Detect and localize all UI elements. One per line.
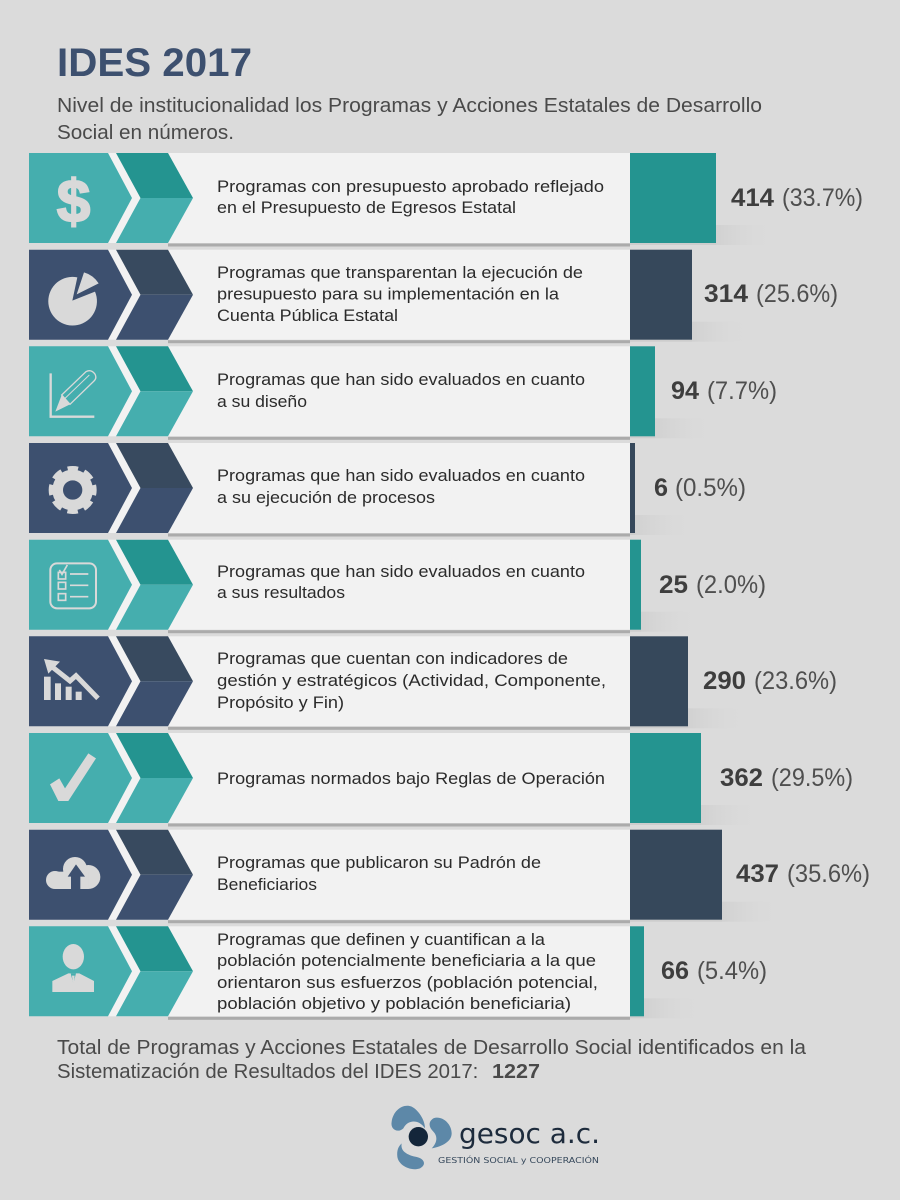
description 9: Programas que definen y cuantifican a la	[217, 930, 546, 949]
row 7: reglas de operación	[29, 733, 853, 826]
icon: dollar sign: $	[57, 168, 90, 235]
description 5: Programas que han sido evaluados en cuanto	[217, 562, 585, 581]
footer total note: Total de Programas y Acciones Estatales de Desarrollo Social identificados en la	[57, 1037, 807, 1059]
description 1: en el Presupuesto de Egresos Estatal	[217, 198, 516, 217]
logo: gesoc a.c.	[391, 1106, 600, 1169]
row 6: indicadores	[29, 636, 837, 730]
value 5: 25	[659, 571, 688, 599]
value 9: (5.4%)	[697, 957, 767, 985]
value 2: (25.6%)	[756, 280, 838, 308]
value 8: (35.6%)	[787, 860, 870, 888]
value 3: (7.7%)	[707, 377, 777, 405]
row 8: padrón de beneficiarios	[29, 830, 870, 923]
footer total note: Sistematización de Resultados del IDES 2017:	[57, 1061, 484, 1083]
value 4: 6	[654, 474, 668, 502]
row 4: evaluados en procesos	[29, 443, 746, 536]
value 1: 414	[731, 184, 774, 212]
value 4: (0.5%)	[675, 474, 746, 502]
icon: trend chart	[44, 659, 98, 700]
subtitle: Nivel de institucionalidad los Programas y Acciones Estatales de Desarrollo	[57, 95, 762, 117]
icon: pencil and axes	[51, 371, 96, 417]
description 3: a su diseño	[217, 392, 307, 411]
icon: person	[52, 944, 94, 992]
icon: checklist	[50, 563, 96, 608]
icon: gear	[52, 469, 93, 511]
value 3: 94	[671, 377, 699, 405]
footer total note: 1227	[492, 1061, 540, 1083]
value 6: 290	[703, 667, 746, 695]
row 2: cuenta pública	[29, 250, 838, 343]
description 2: presupuesto para su implementación en la	[217, 284, 560, 304]
description 6: Propósito y Fin)	[217, 693, 344, 712]
description 2: Programas que transparentan la ejecución de	[217, 263, 583, 282]
icon: cloud upload	[46, 857, 100, 890]
description 5: a sus resultados	[217, 583, 345, 602]
icon: pie chart	[48, 272, 99, 326]
description 3: Programas que han sido evaluados en cuanto	[217, 370, 585, 389]
value 7: 362	[720, 764, 763, 792]
value 5: (2.0%)	[696, 571, 766, 599]
description 8: Programas que publicaron su Padrón de	[217, 853, 541, 872]
description 4: a su ejecución de procesos	[217, 488, 435, 507]
value 1: (33.7%)	[782, 184, 863, 212]
value 6: (23.6%)	[754, 667, 837, 695]
row 1: presupuesto aprobado	[29, 153, 863, 246]
title: IDES 2017	[57, 41, 252, 85]
subtitle: Social en números.	[57, 122, 234, 144]
icon: check mark	[50, 753, 96, 801]
description 7: Programas normados bajo Reglas de Operación	[217, 769, 605, 788]
description 4: Programas que han sido evaluados en cuanto	[217, 466, 585, 485]
row 5: evaluados en resultados	[29, 540, 766, 633]
logo: gesoc a.c.: gesoc a.c.	[459, 1117, 600, 1150]
row 3: evaluados en diseño	[29, 346, 777, 440]
description 8: Beneficiarios	[217, 875, 317, 894]
value 2: 314	[704, 280, 748, 308]
description 6: Programas que cuentan con indicadores de	[217, 649, 568, 668]
description 1: Programas con presupuesto aprobado reflejado	[217, 177, 604, 196]
value 9: 66	[661, 957, 689, 985]
description 9: población potencialmente beneficiaria a la que	[217, 951, 596, 970]
value 8: 437	[736, 860, 779, 888]
value 7: (29.5%)	[771, 764, 853, 792]
description 6: gestión y estratégicos (Actividad, Componente,	[217, 671, 606, 690]
description 9: población objetivo y población beneficiaria)	[217, 994, 571, 1013]
row 9: población beneficiaria	[29, 926, 767, 1020]
description 9: orientaron sus esfuerzos (población potencial,	[217, 973, 598, 992]
logo: gesoc a.c.: GESTIÓN SOCIAL y COOPERACIÓN	[438, 1156, 599, 1165]
description 2: Cuenta Pública Estatal	[217, 306, 398, 325]
